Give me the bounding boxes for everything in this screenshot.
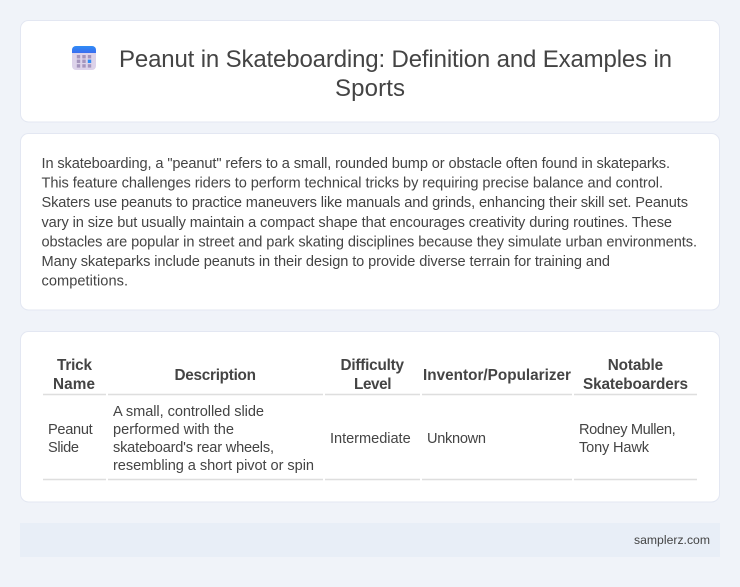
table data row: resembling a short pivot or spin: [113, 458, 314, 474]
title: Sports: [335, 75, 405, 102]
table header row: Difficulty: [340, 357, 404, 374]
text block: definition: This feature challenges riders to perform technical tricks by requiring precise balance and control.: [42, 176, 663, 192]
text block: definition: competitions.: [42, 274, 128, 290]
table data row: [48, 404, 676, 474]
text block: definition: vary in size but usually maintain a compact shape that encourages creativity during routines. These: [42, 215, 672, 231]
text block: definition: Many skateparks include peanuts in their design to provide diverse terrain for training and: [42, 254, 610, 270]
table data row: Rodney Mullen,: [579, 422, 676, 438]
text block: definition: obstacles are popular in street and park skating disciplines because they simulate urban environments.: [42, 234, 697, 250]
text block: definition: In skateboarding, a "peanut" refers to a small, rounded bump or obstacle often found in skateparks.: [42, 156, 670, 172]
panel: title card: [20, 20, 720, 122]
table data row: Tony Hawk: [579, 440, 650, 456]
table header row: Level: [354, 376, 392, 393]
panel: definition paragraph: [20, 134, 720, 310]
table data row: skateboard's rear wheels,: [113, 440, 274, 456]
footer text: source: samplerz.com: [634, 533, 710, 547]
table data row: A small, controlled slide: [113, 404, 264, 420]
table header row: [53, 357, 688, 393]
table data row: Intermediate: [330, 431, 411, 447]
text block: definition: Skaters use peanuts to practice maneuvers like manuals and grinds, enhancing their skill set. Peanuts: [42, 195, 688, 211]
table data row: performed with the: [113, 422, 234, 438]
icon: calendar: [72, 46, 96, 70]
table header row: Skateboarders: [583, 376, 688, 393]
title: [119, 46, 672, 102]
table header row: Notable: [608, 357, 663, 374]
table data row: Unknown: [427, 431, 486, 447]
table header row: Name: [53, 376, 95, 393]
footer: [20, 523, 720, 557]
table header row: Trick: [57, 357, 92, 374]
title: Peanut in Skateboarding: Definition and Examples in: [119, 46, 672, 73]
table header row: Inventor/Popularizer: [423, 367, 571, 384]
table data row: Peanut: [48, 422, 93, 438]
panel: tricks table: [20, 332, 720, 502]
table header row: Description: [174, 367, 256, 384]
text block: definition: [42, 156, 697, 290]
table data row: Slide: [48, 440, 79, 456]
